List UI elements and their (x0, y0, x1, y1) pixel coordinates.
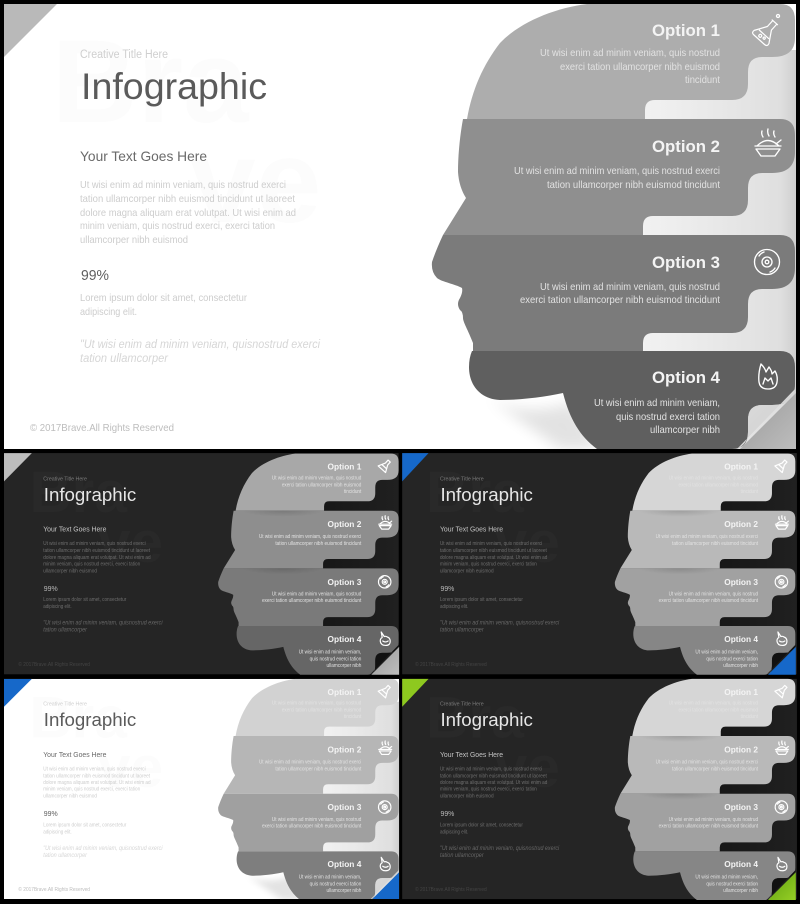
head band: option 2: tation ullamcorper nibh euismod tincidunt (672, 541, 759, 547)
panel: main white slide (4, 4, 796, 450)
watermark (52, 16, 321, 248)
head band: option 3: Ut wisi enim ad minim veniam, quis nostrud (272, 817, 361, 823)
head band: option 1: Option 1 (724, 687, 758, 697)
head band: option 1: Option 1 (328, 461, 362, 471)
head band: option 2: tation ullamcorper nibh euismod tincidunt (275, 766, 362, 772)
stat: 99% (44, 811, 126, 834)
icon: bowl (379, 516, 392, 529)
quote: tation ullamcorper (440, 853, 485, 859)
panel: dark slide with blue accent (402, 453, 797, 675)
watermark: Bra (29, 686, 127, 751)
watermark (29, 686, 163, 800)
panel: dark slide with green accent (402, 679, 797, 900)
text block: intro: ullamcorper nibh euismod (440, 794, 494, 800)
notch shading (718, 702, 797, 899)
text block: intro (440, 752, 547, 800)
watermark (29, 460, 163, 575)
title block: Infographic (440, 709, 533, 730)
text block: intro: Ut wisi enim ad minim veniam, quis nostrud exerci (80, 179, 286, 191)
copyright: © 2017Brave.All Rights Reserved (415, 886, 487, 893)
title block: Creative Title Here (43, 702, 87, 708)
head band: option 1: Ut wisi enim ad minim veniam, quis nostrud (540, 47, 720, 59)
notch shading (322, 476, 399, 674)
quote (43, 846, 163, 859)
watermark: ve (190, 116, 321, 248)
head band: option 4: ullamcorper nibh (723, 888, 758, 894)
head band: option 4: Ut wisi enim ad minim veniam, (695, 875, 758, 881)
head band: option 1: Ut wisi enim ad minim veniam, quis nostrud (272, 475, 361, 481)
head band: option 4 (237, 851, 399, 900)
copyright: © 2017Brave.All Rights Reserved (30, 422, 174, 434)
head band: option 3 (218, 794, 399, 851)
quote: tation ullamcorper (440, 628, 485, 634)
quote: "Ut wisi enim ad minim veniam, quisnostrud exerci (440, 846, 560, 852)
notch shading (322, 702, 399, 900)
icon: disc (775, 576, 788, 588)
copyright: © 2017Brave.All Rights Reserved (18, 886, 90, 893)
head band: option 2 (224, 511, 399, 568)
head band: option 3 (615, 568, 795, 626)
head band: option 4: Ut wisi enim ad minim veniam, (299, 875, 361, 881)
quote: tation ullamcorper (80, 351, 169, 365)
text block: intro: minim veniam, quis nostrud exerci, exerci tation (43, 787, 140, 793)
head band: option 4: Option 4 (328, 634, 362, 644)
head band: option 2: tation ullamcorper nibh euismod tincidunt (275, 541, 362, 547)
copyright: © 2017Brave.All Rights Reserved (415, 661, 487, 668)
stat: 99%: adipiscing elit. (440, 604, 468, 610)
stat: 99%: Lorem ipsum dolor sit amet, consectetur (80, 292, 247, 304)
head band: option 1: Option 1 (724, 461, 758, 471)
text block: intro: minim veniam, quis nostrud exerci, exerci tation (440, 561, 537, 567)
head band: option 4: ullamcorper nibh (650, 424, 720, 436)
head band: option 2 (620, 511, 795, 568)
notch shading behind the head (640, 50, 796, 450)
head band: option 2: Ut wisi enim ad minim veniam, quis nostrud exerci (259, 534, 361, 540)
head band: option 3: exerci tation ullamcorper nibh euismod tincidunt (659, 823, 759, 829)
head band: option 2 (620, 736, 795, 794)
head band: option 4: ullamcorper nibh (723, 663, 758, 669)
head band: option 3: exerci tation ullamcorper nibh euismod tincidunt (659, 598, 759, 604)
head band: option 3: Option 3 (724, 577, 758, 587)
page curl (766, 645, 796, 675)
head band: option 1 (467, 4, 795, 119)
stat: 99%: 99% (440, 809, 455, 818)
quote: tation ullamcorper (43, 853, 88, 859)
title block: Creative Title Here (440, 476, 484, 482)
stat: 99%: Lorem ipsum dolor sit amet, consectetur (43, 597, 126, 603)
icon: flask (752, 14, 782, 46)
head band: option 1: exerci tation ullamcorper nibh euismod (679, 482, 758, 488)
head band: option 2 (224, 736, 399, 794)
icon: hand (777, 857, 787, 871)
title block (80, 49, 267, 107)
head band: option 2: Option 2 (652, 137, 720, 156)
head band: option 3: Option 3 (724, 802, 758, 812)
head band: option 1 (236, 454, 399, 511)
head band: option 1: exerci tation ullamcorper nibh euismod (282, 708, 361, 714)
chin shadow (507, 402, 596, 449)
head band: option 1: exerci tation ullamcorper nibh euismod (560, 61, 720, 73)
quote (440, 846, 560, 859)
copyright: © 2017Brave.All Rights Reserved (18, 661, 90, 668)
head band: option 2: Option 2 (328, 744, 362, 754)
head band: option 3: exerci tation ullamcorper nibh euismod tincidunt (520, 294, 720, 306)
stat: 99%: Lorem ipsum dolor sit amet, consectetur (43, 822, 126, 828)
text block: intro: tation ullamcorper nibh euismod tincidunt ut laoreet (440, 773, 547, 779)
head band: option 2: Ut wisi enim ad minim veniam, quis nostrud exerci (656, 759, 758, 765)
panel: dark slide with grey accent (4, 453, 399, 675)
stat: 99%: adipiscing elit. (43, 604, 72, 610)
quote: "Ut wisi enim ad minim veniam, quisnostrud exerci (43, 621, 163, 627)
head band: option 2: Ut wisi enim ad minim veniam, quis nostrud exerci (656, 534, 758, 540)
title block: Creative Title Here (440, 702, 484, 708)
title block: Infographic (44, 484, 136, 505)
stat: 99%: adipiscing elit. (43, 829, 72, 835)
text block: intro (43, 752, 151, 800)
head band: option 2: Option 2 (724, 744, 758, 754)
watermark: Bra (426, 460, 524, 525)
head band: option 3: Option 3 (328, 577, 362, 587)
text block: intro (80, 148, 296, 246)
head band: option 4: ullamcorper nibh (327, 663, 361, 669)
icon: disc (378, 576, 391, 588)
watermark: ve (495, 510, 560, 575)
corner triangle (4, 679, 32, 707)
text block: intro: Ut wisi enim ad minim veniam, quis nostrud exerci (43, 541, 146, 547)
watermark: Bra (29, 460, 127, 525)
watermark: Bra (426, 686, 524, 751)
head band: option 4: Option 4 (652, 368, 721, 387)
head band: option 3: Option 3 (652, 253, 720, 272)
head band: option 1: Option 1 (328, 687, 362, 697)
head band: option 4: quis nostrud exerci tation (310, 656, 361, 662)
stat: 99%: Lorem ipsum dolor sit amet, consectetur (440, 822, 523, 828)
stat: 99% (440, 584, 523, 610)
head band: option 3: Ut wisi enim ad minim veniam, quis nostrud (669, 592, 758, 598)
text block: intro: dolore magna aliquam erat volutpat. Ut wisi enim ad (440, 555, 547, 561)
head band: option 4 (469, 351, 795, 449)
stat: 99% (440, 809, 523, 835)
text block: intro: minim veniam, quis nostrud exerci, exerci tation (440, 787, 537, 793)
head band: option 4 (633, 851, 795, 900)
head band: option 1: Ut wisi enim ad minim veniam, quis nostrud (669, 701, 758, 707)
head band: option 4: quis nostrud exerci tation (706, 656, 758, 662)
stat: 99%: 99% (440, 584, 455, 593)
text block: intro: Ut wisi enim ad minim veniam, quis nostrud exerci (440, 541, 542, 547)
text block: intro: dolore magna aliquam erat volutpat. Ut wisi enim ad (43, 555, 151, 561)
quote (80, 337, 320, 365)
text block: intro: Ut wisi enim ad minim veniam, quis nostrud exerci (43, 766, 146, 772)
text block: intro: Your Text Goes Here (80, 148, 207, 164)
corner triangle (402, 453, 429, 481)
icon: brush (775, 683, 790, 698)
head band: option 1: tincidunt (741, 489, 759, 495)
corner triangle (4, 4, 57, 57)
text block: intro: tation ullamcorper nibh euismod tincidunt ut laoreet (440, 548, 547, 554)
icon: bowl (775, 516, 788, 529)
text block: intro: minim veniam, quis nostrud exerci, exerci tation (43, 561, 140, 567)
head band: option 3 (432, 235, 795, 351)
head band: option 4: quis nostrud exerci tation (706, 882, 758, 888)
page curl (737, 389, 796, 449)
text block: intro: ullamcorper nibh euismod (80, 234, 188, 246)
icon: disc (775, 801, 788, 813)
head band: option 2: Ut wisi enim ad minim veniam, quis nostrud exerci (514, 165, 720, 177)
page curl (370, 645, 399, 675)
icon: bowl (775, 741, 788, 754)
head band: option 4: quis nostrud exerci tation (310, 882, 361, 888)
stat: 99%: 99% (44, 584, 58, 593)
page curl (766, 870, 796, 900)
head band: option 1: tincidunt (344, 714, 362, 720)
icon: bowl (755, 129, 781, 156)
title block: Infographic (44, 709, 136, 730)
head band: option 1: tincidunt (344, 489, 362, 495)
watermark: Bra (52, 16, 250, 148)
watermark (426, 460, 560, 575)
page curl (370, 870, 399, 900)
head band: option 4: Ut wisi enim ad minim veniam, (695, 649, 758, 655)
quote (440, 621, 560, 634)
head band: option 3: exerci tation ullamcorper nibh euismod tincidunt (262, 598, 362, 604)
head band: option 3: Ut wisi enim ad minim veniam, quis nostrud (669, 817, 758, 823)
stat: 99% (80, 267, 247, 318)
text block: intro: minim veniam, quis nostrud exerci, exerci tation (80, 220, 275, 232)
head band: option 3 (218, 568, 399, 626)
icon: brush (378, 458, 393, 473)
head band: option 4: quis nostrud exerci tation (616, 411, 720, 423)
head band: option 1 (632, 454, 795, 511)
text block: intro: Your Text Goes Here (440, 752, 503, 759)
text block: intro: ullamcorper nibh euismod (43, 794, 97, 800)
head band: option 4: Option 4 (724, 859, 758, 869)
head band: option 4: ullamcorper nibh (327, 888, 361, 894)
icon: bowl (379, 741, 392, 754)
icon: brush (378, 684, 391, 698)
chin shadow (256, 876, 298, 899)
text block: intro: dolore magna aliquam erat volutpat. Ut wisi enim ad (440, 780, 547, 786)
text block: intro (440, 527, 547, 574)
icon: hand (777, 632, 787, 645)
title block: Infographic (81, 66, 267, 107)
quote: "Ut wisi enim ad minim veniam, quisnostrud exerci (43, 846, 163, 852)
title block: Creative Title Here (43, 476, 87, 482)
head band: option 3 (615, 794, 795, 851)
text block: intro: dolore magna aliquam erat volutpat. Ut wisi enim ad (80, 207, 296, 219)
head band: option 1 (236, 679, 399, 736)
text block: intro: Your Text Goes Here (440, 527, 503, 534)
text block: intro: ullamcorper nibh euismod (440, 568, 494, 574)
icon: brush (775, 458, 790, 473)
head band: option 1 (632, 679, 795, 736)
stat: 99%: adipiscing elit. (80, 306, 137, 318)
text block: intro: Ut wisi enim ad minim veniam, quis nostrud exerci (440, 766, 542, 772)
head band: option 1: Ut wisi enim ad minim veniam, quis nostrud (669, 475, 758, 481)
panel: white slide with blue accent (4, 679, 399, 900)
head band: option 4 (237, 626, 399, 675)
watermark (426, 686, 560, 800)
text block: intro: tation ullamcorper nibh euismod tincidunt ut laoreet (43, 548, 151, 554)
head band: option 3: Option 3 (328, 802, 362, 812)
head band: option 3: Ut wisi enim ad minim veniam, quis nostrud (540, 281, 720, 293)
head band: option 3: Ut wisi enim ad minim veniam, quis nostrud (272, 592, 361, 598)
text block: intro: dolore magna aliquam erat volutpat. Ut wisi enim ad (43, 780, 151, 786)
head band: option 4: Ut wisi enim ad minim veniam, (594, 397, 720, 409)
icon: hand (380, 857, 390, 871)
watermark: ve (98, 735, 163, 800)
text block: intro (43, 527, 151, 574)
watermark: ve (495, 735, 560, 800)
text block: intro: tation ullamcorper nibh euismod tincidunt ut laoreet (80, 193, 295, 205)
quote: "Ut wisi enim ad minim veniam, quisnostrud exerci (440, 621, 560, 627)
head band: option 2: Option 2 (724, 519, 758, 529)
icon: disc (378, 801, 391, 813)
head band: option 1: tincidunt (685, 74, 720, 86)
stat: 99%: 99% (44, 809, 58, 818)
head band: option 2: tation ullamcorper nibh euismod tincidunt (547, 179, 720, 191)
head band: option 1: exerci tation ullamcorper nibh euismod (282, 482, 361, 488)
quote: "Ut wisi enim ad minim veniam, quisnostrud exerci (80, 337, 320, 351)
head band: option 3: exerci tation ullamcorper nibh euismod tincidunt (262, 823, 362, 829)
head band: option 1: Ut wisi enim ad minim veniam, quis nostrud (272, 701, 361, 707)
head band: option 4: Option 4 (328, 859, 362, 869)
quote: tation ullamcorper (43, 628, 88, 634)
text block: intro: tation ullamcorper nibh euismod tincidunt ut laoreet (43, 773, 151, 779)
head band: option 1: exerci tation ullamcorper nibh euismod (679, 708, 758, 714)
stat: 99%: 99% (81, 267, 109, 284)
icon: disc (754, 250, 780, 274)
title block: Infographic (440, 484, 533, 505)
stat: 99% (43, 584, 126, 610)
head band: option 2: Option 2 (328, 519, 362, 529)
stat: 99%: Lorem ipsum dolor sit amet, consectetur (440, 597, 523, 603)
text block: intro: ullamcorper nibh euismod (43, 568, 97, 574)
icon: hand (380, 632, 390, 645)
text block: intro: Your Text Goes Here (43, 527, 107, 534)
head band: option 2 (443, 119, 795, 235)
head band: option 2: tation ullamcorper nibh euismod tincidunt (672, 766, 759, 772)
head band: option 2: Ut wisi enim ad minim veniam, quis nostrud exerci (259, 759, 361, 765)
head band: option 4: Option 4 (724, 634, 758, 644)
notch shading (718, 476, 797, 674)
corner triangle (4, 453, 32, 481)
head band: option 4: Ut wisi enim ad minim veniam, (299, 649, 361, 655)
head band: option 1: Option 1 (652, 21, 720, 40)
stat: 99%: adipiscing elit. (440, 829, 468, 835)
icon: flame (759, 364, 777, 389)
title block: Creative Title Here (80, 49, 168, 61)
watermark: ve (98, 510, 163, 575)
head band: option 1: tincidunt (741, 714, 759, 720)
head band: option 4 (633, 626, 795, 675)
corner triangle (402, 679, 429, 707)
quote (43, 621, 163, 634)
text block: intro: Your Text Goes Here (43, 752, 107, 759)
